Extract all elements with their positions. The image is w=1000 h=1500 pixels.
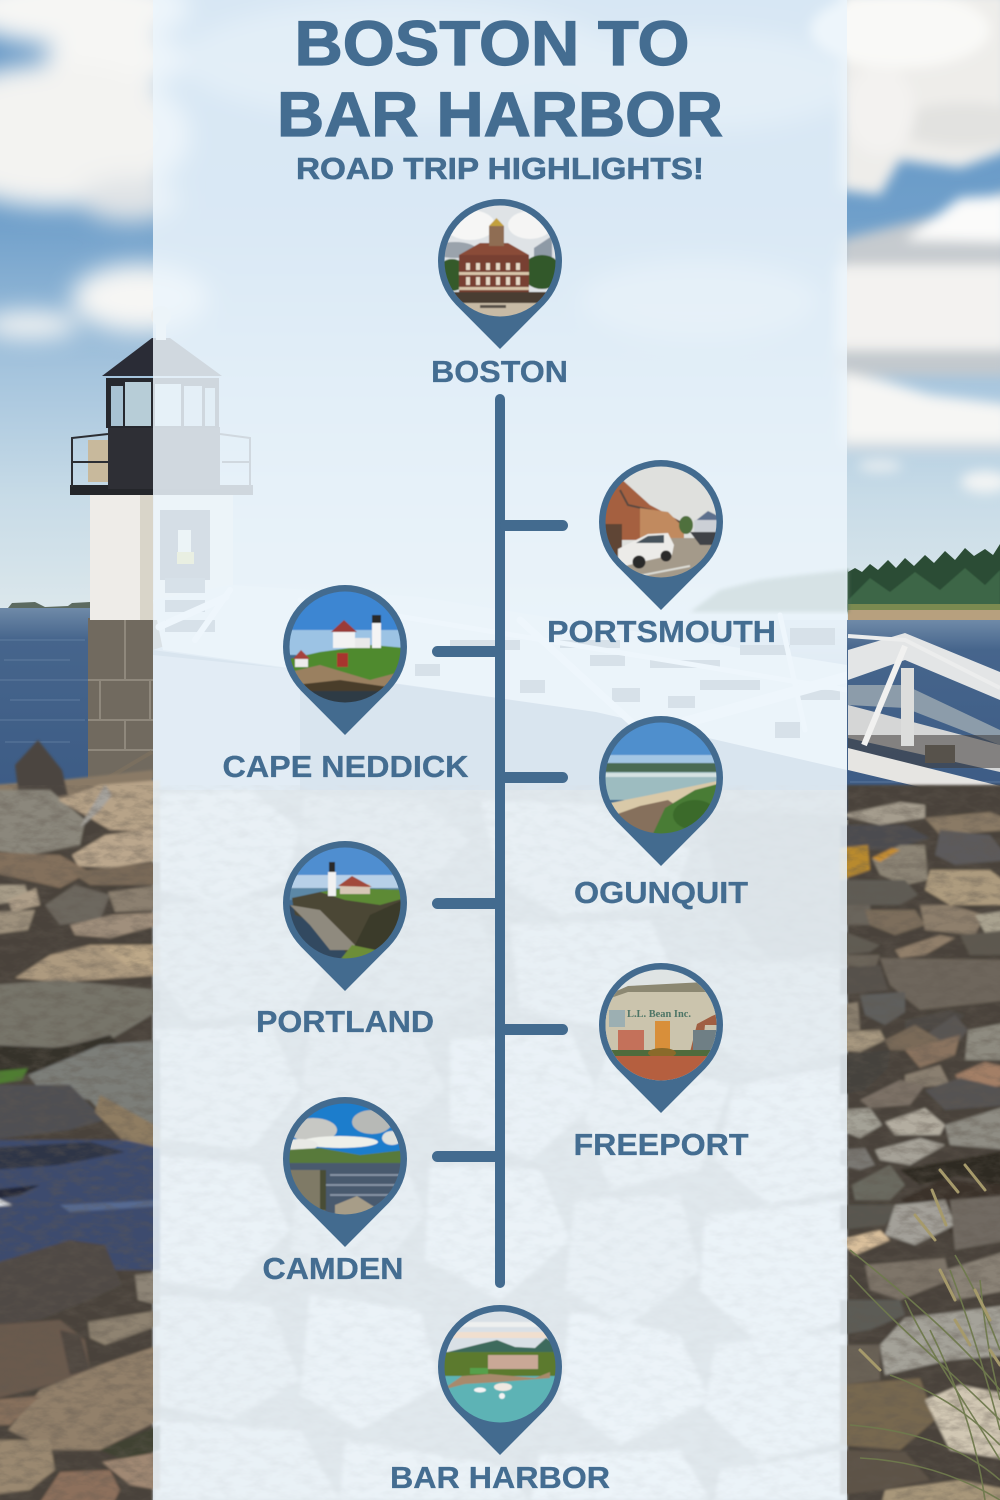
pin: Bar Harbor bbox=[438, 1305, 562, 1455]
store sign: L.L. Bean Inc. bbox=[627, 1008, 691, 1020]
distant tree line and shore bbox=[0, 544, 1000, 621]
translucent centre panel bbox=[153, 0, 847, 1500]
label: Cape Neddick: CAPE NEDDICK bbox=[222, 749, 469, 784]
sea: left and right of panel bbox=[0, 608, 1000, 820]
label: Boston: BOSTON bbox=[431, 354, 568, 389]
title: Boston to Bar Harbor: BOSTON TO bbox=[294, 9, 690, 79]
label: Freeport: FREEPORT bbox=[574, 1127, 749, 1162]
left rocks bbox=[0, 740, 160, 1500]
rocks seen through panel bbox=[150, 790, 850, 1500]
dune grass bbox=[850, 1250, 1000, 1500]
lighthouse bbox=[70, 306, 253, 778]
sky bbox=[0, 0, 1000, 620]
sea ripples bbox=[0, 640, 1000, 795]
dock bridge seen through panel bbox=[153, 578, 847, 800]
title: Boston to Bar Harbor: BAR HARBOR bbox=[277, 80, 723, 150]
label: Camden: CAMDEN bbox=[262, 1251, 404, 1286]
route timeline with branches bbox=[432, 394, 568, 1288]
label: Portland: PORTLAND bbox=[256, 1004, 434, 1039]
right dock section bbox=[848, 633, 1000, 806]
label: Portsmouth: PORTSMOUTH bbox=[547, 614, 776, 649]
rock texture bbox=[0, 785, 1000, 1500]
label: Bar Harbor: BAR HARBOR bbox=[390, 1460, 610, 1495]
pin: Boston Faneuil Hall bbox=[433, 199, 562, 349]
label: Ogunquit: OGUNQUIT bbox=[574, 875, 748, 910]
pin: Ogunquit beach bbox=[599, 716, 725, 866]
pin: Portland Head Light bbox=[283, 841, 407, 991]
right rocks bbox=[840, 802, 1000, 1500]
pin: Freeport L.L. Bean store bbox=[599, 963, 723, 1113]
clouds bbox=[0, 0, 1000, 493]
pin: Portsmouth street bbox=[599, 460, 723, 610]
title: Boston to Bar Harbor bbox=[277, 9, 723, 150]
pin: Camden harbor bbox=[282, 1097, 407, 1247]
pin: Cape Neddick lighthouse bbox=[283, 585, 407, 735]
rocks foreground bbox=[0, 740, 1000, 1500]
subtitle: ROAD TRIP HIGHLIGHTS! bbox=[296, 151, 704, 186]
